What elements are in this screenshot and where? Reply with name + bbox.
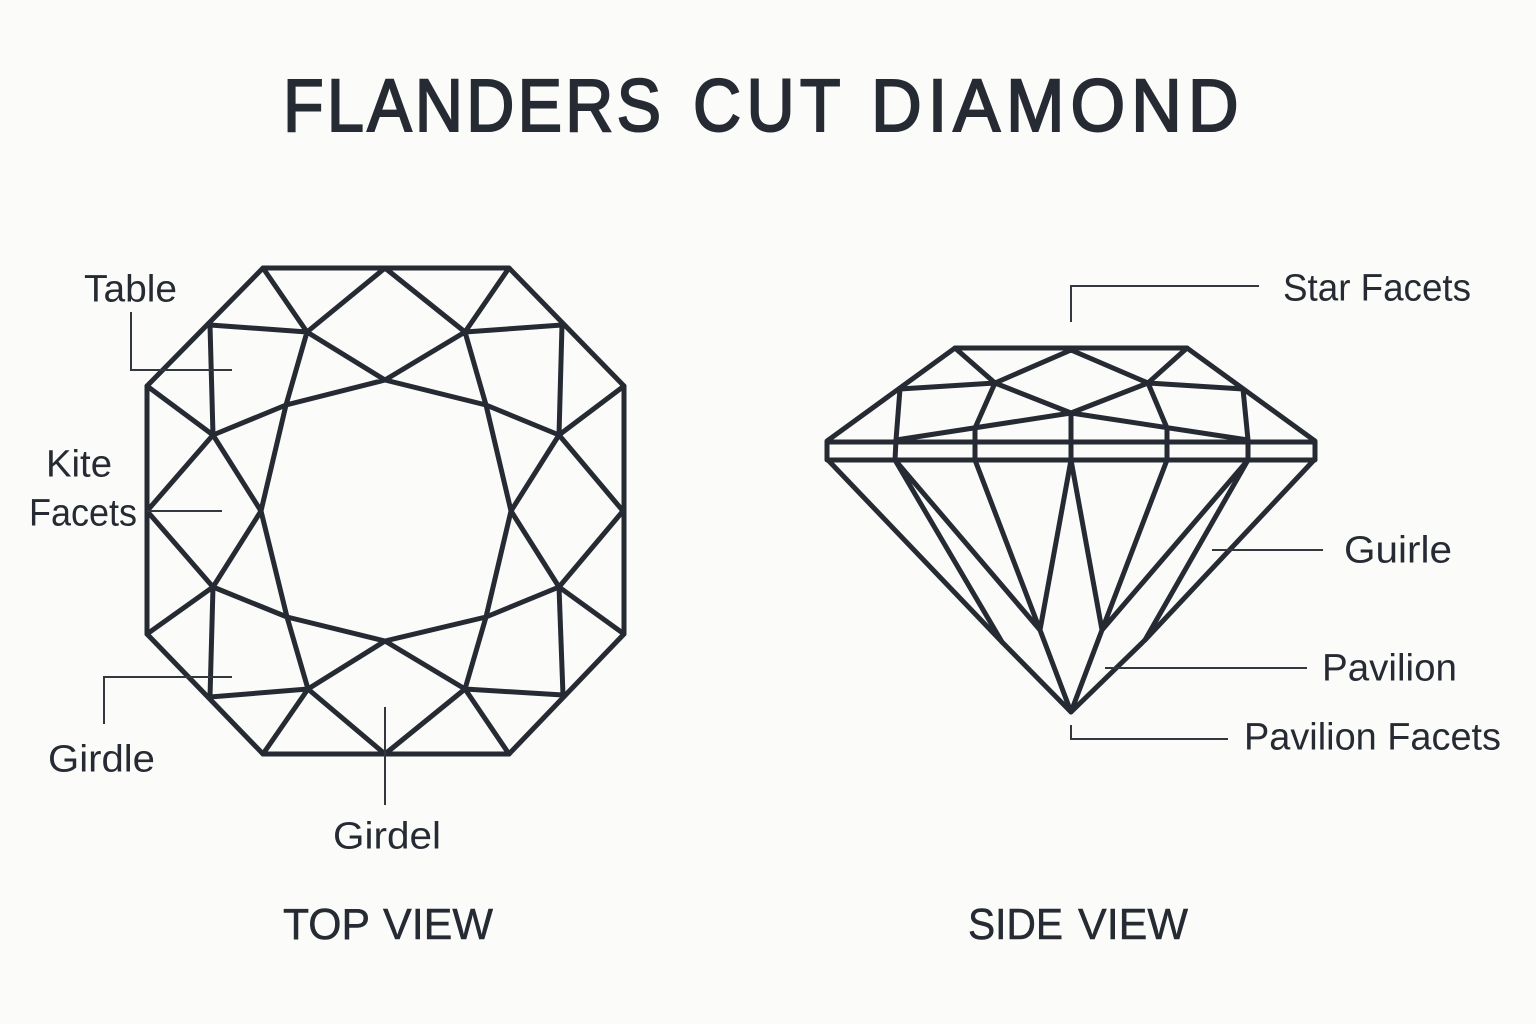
leader: Pavilion (1105, 667, 1307, 669)
leader: Guirle (1212, 549, 1323, 551)
label: Pavilion: Pavilion (1322, 648, 1457, 690)
label: Kite Facets: Facets (29, 492, 137, 534)
girdle outline octagon (147, 268, 624, 754)
heading: top view: TOP (283, 900, 370, 949)
title: DIAMOND (871, 65, 1239, 147)
leader: Pavilion Facets (1071, 725, 1228, 739)
diagram: top view of diamond (147, 268, 624, 754)
label: Kite Facets: Kite (46, 444, 112, 486)
title: CUT (693, 64, 841, 147)
label: Star Facets: Star Facets (1283, 268, 1471, 310)
leader: Girdle (104, 677, 232, 724)
diagram: side view of diamond (827, 348, 1315, 712)
crown facet lines, top view (147, 268, 624, 754)
label: Pavilion Facets: Pavilion Facets (1244, 716, 1501, 758)
pavilion facet lines (895, 460, 1248, 712)
leader: Star Facets (1071, 286, 1259, 322)
heading: top view: VIEW (383, 900, 493, 949)
title (283, 64, 1239, 147)
title: FLANDERS (283, 64, 661, 147)
leader: Girdel (384, 707, 386, 805)
label: Girdle: Girdle (48, 738, 155, 780)
girdle band lines (827, 442, 1315, 460)
heading: side view: SIDE (968, 900, 1063, 949)
leader: Kite Facets (147, 510, 222, 512)
crown facet lines, side view (895, 348, 1248, 460)
heading: side view: VIEW (1078, 900, 1188, 949)
heading: top view (283, 900, 493, 949)
heading: side view (968, 900, 1188, 949)
outer silhouette (827, 348, 1315, 712)
label: Guirle: Guirle (1344, 530, 1452, 572)
label: Kite Facets (29, 444, 137, 534)
label: Girdel: Girdel (333, 816, 441, 858)
label: Table: Table (84, 268, 177, 310)
leader: Table (131, 312, 232, 370)
